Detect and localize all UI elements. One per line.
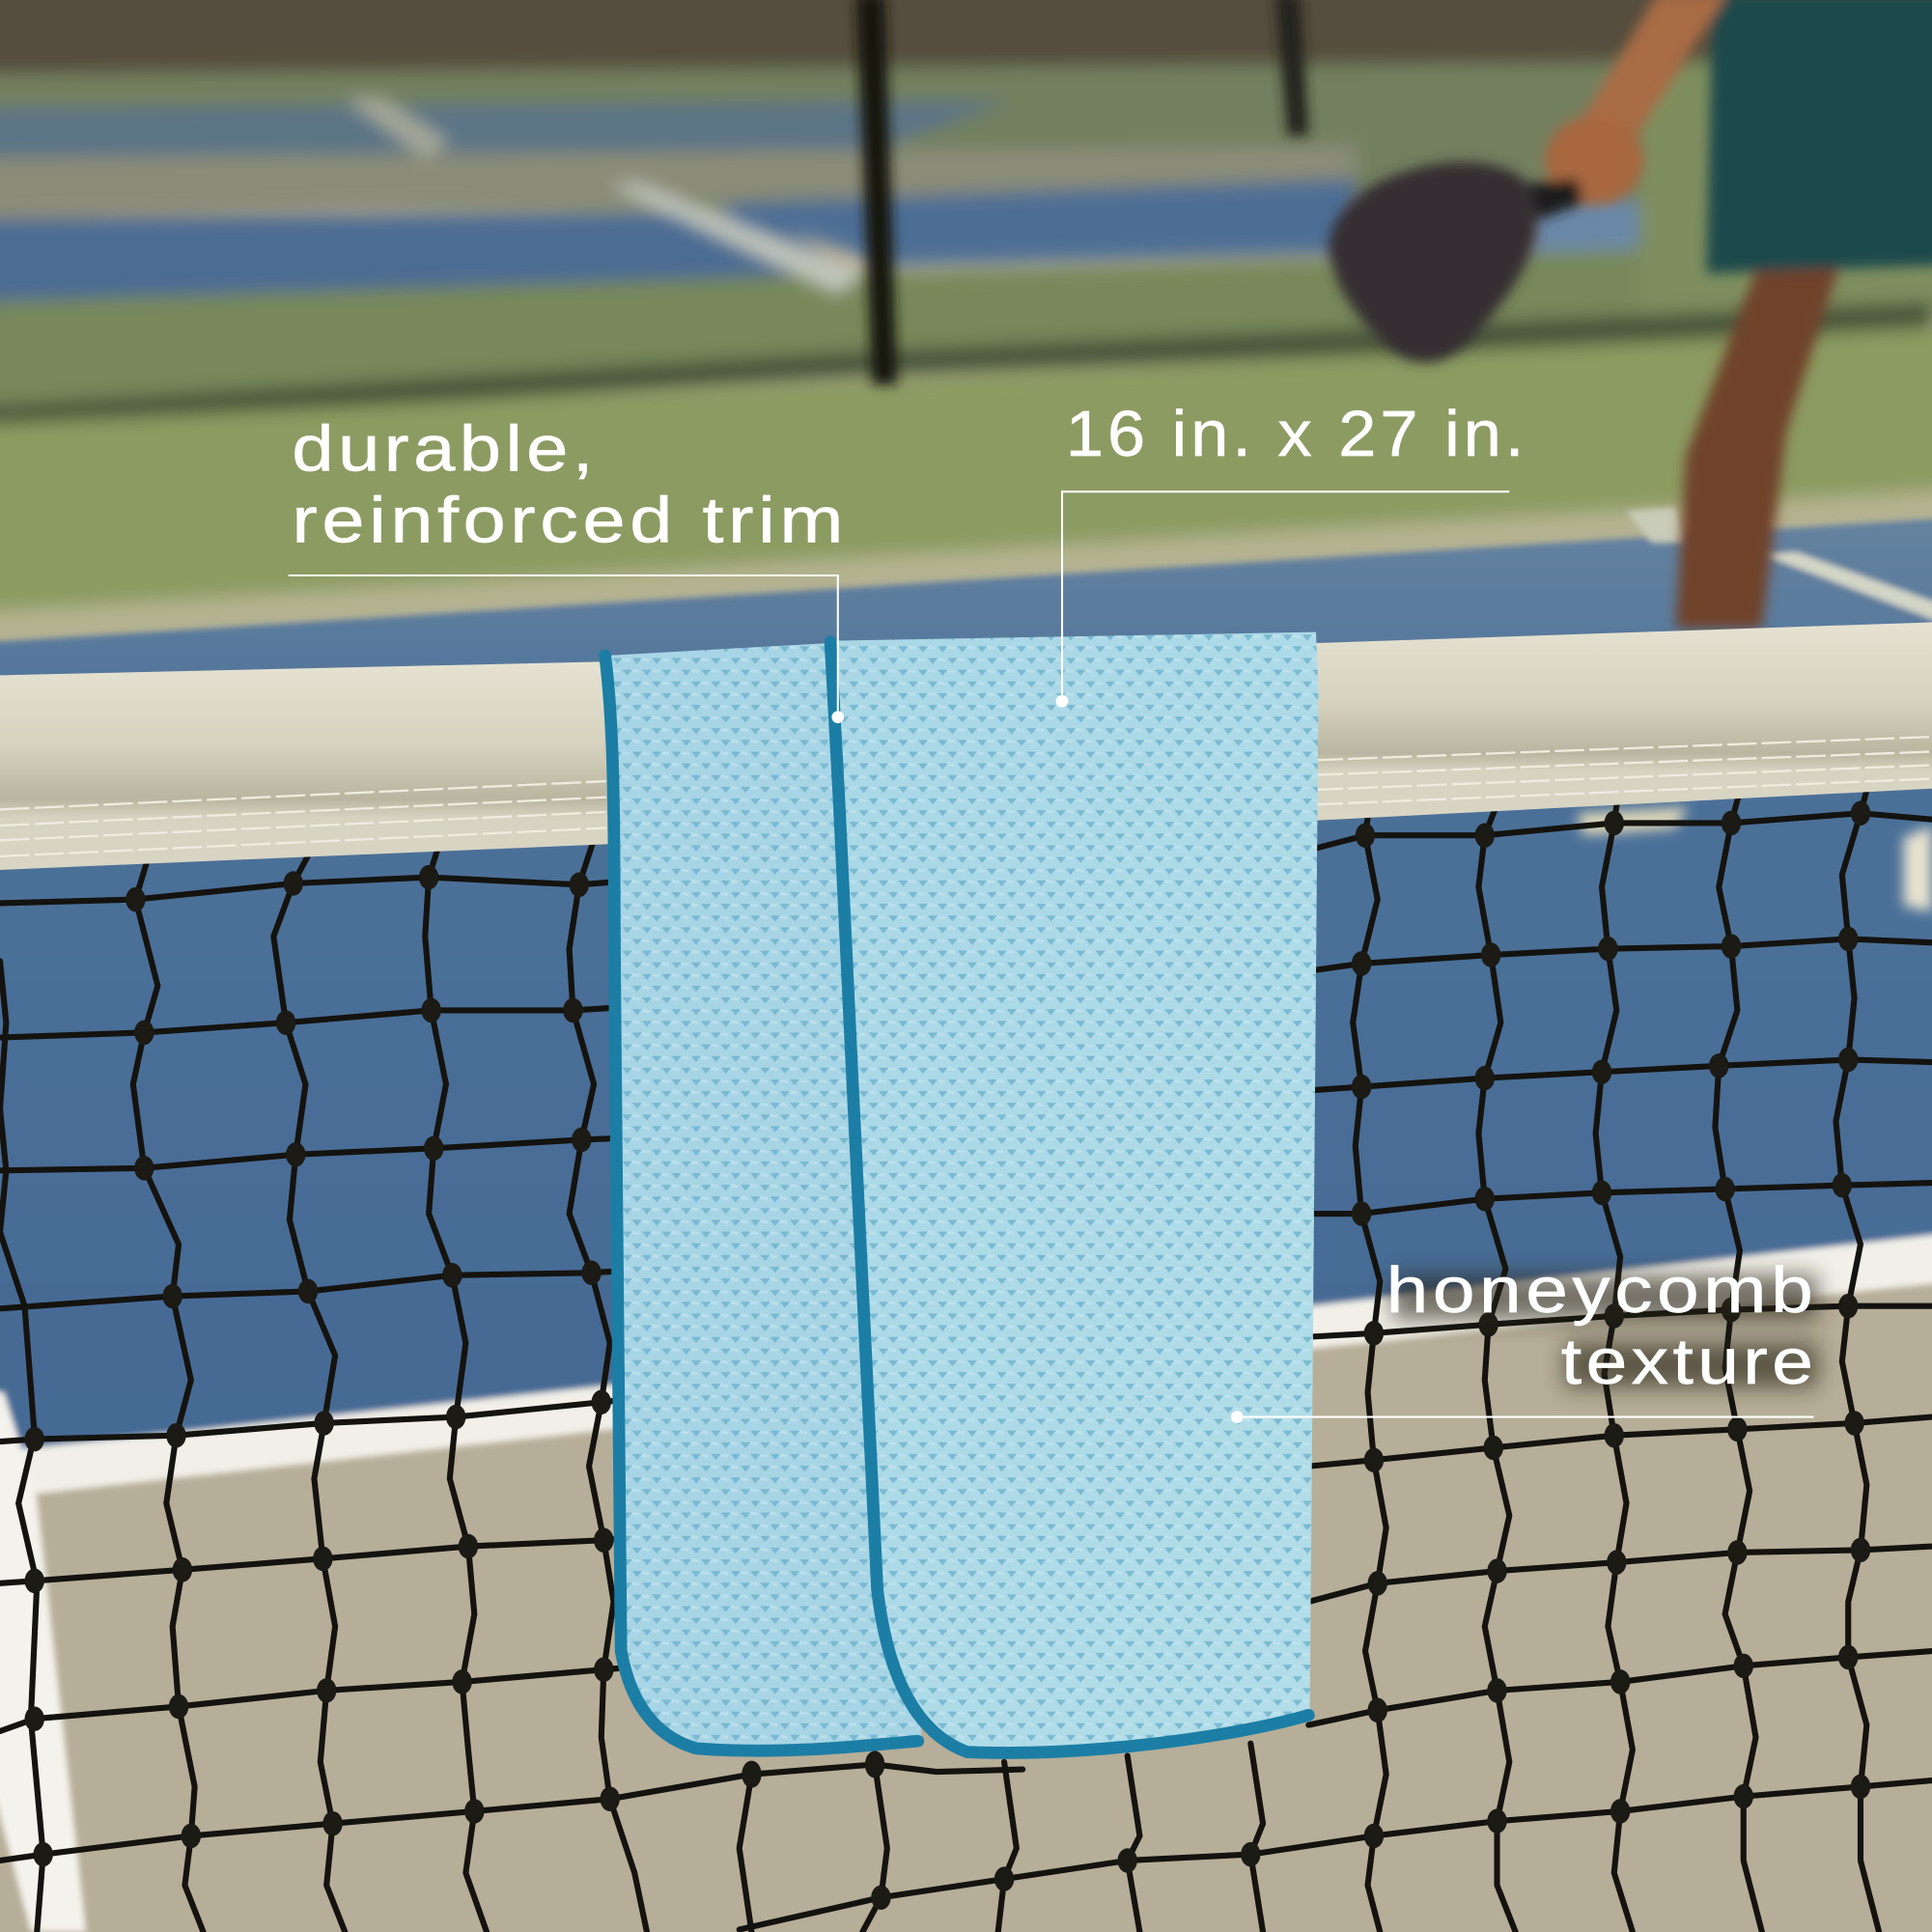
callout: durable, reinforced trim: reinforced trim [292,486,848,557]
callout: size 16 in. x 27 in.: 16 in. x 27 in. [1066,399,1527,470]
callout: honeycomb texture [1231,1255,1817,1423]
near court surface [0,508,1932,1932]
net tape: left section [0,661,611,870]
net tape: right section [1313,622,1932,821]
callout: durable, reinforced trim: durable, [292,413,598,485]
callout: honeycomb texture: texture [1561,1327,1817,1398]
callout: durable, reinforced trim [289,413,848,723]
net mesh [0,776,1932,1932]
player and fence posts [856,0,1932,911]
callout: honeycomb texture: honeycomb [1386,1255,1817,1327]
towel front fold [830,632,1318,1757]
callout: size 16 in. x 27 in. [1056,399,1527,708]
towel back fold [605,643,922,1752]
towel [605,632,1318,1757]
